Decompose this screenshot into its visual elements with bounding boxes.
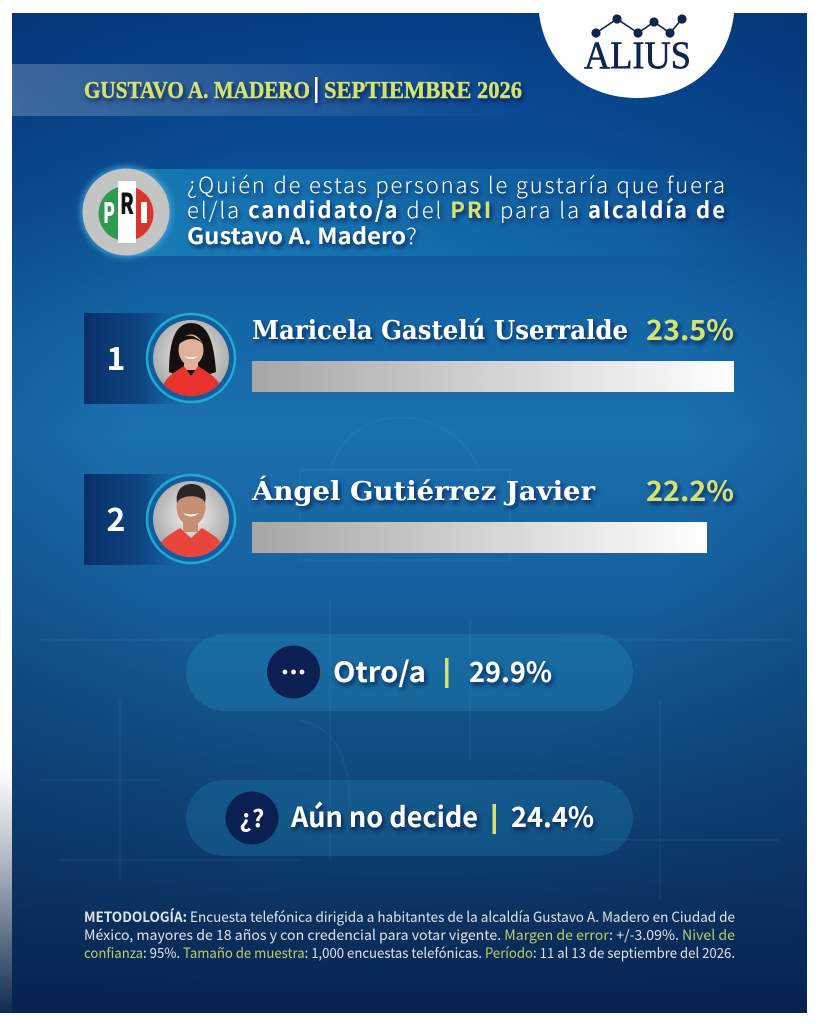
icon: PRI logo: P [103,192,115,232]
methodology note [84,907,735,963]
value 1: 23.5% [646,309,734,349]
question text [187,168,725,251]
left page edge fade [0,770,12,1013]
portrait 1 [147,314,235,402]
question text: Gustavo A. Madero ? [187,219,417,251]
rank 1 tab: 1 [107,334,125,380]
rank 2 tab [84,474,184,565]
bar 1 [252,361,734,392]
icon: question marks: ¿? [240,799,264,834]
methodology note: México, mayores de 18 años y con credencial para votar vigente. Margen de error: +/-3.09%. Nivel de [84,925,735,945]
rank 1 tab [84,313,184,404]
header ribbon [12,64,520,116]
rank 2 tab: 2 [107,495,125,541]
candidate 2 [84,470,734,565]
methodology note: METODOLOGÍA: Encuesta telefónica dirigida a habitantes de la alcaldía Gustavo A. Madero en Ciudad de [84,907,735,927]
icon: question marks [226,792,278,844]
icon: PRI logo [80,166,172,258]
pill: otro/a: 29.9% [469,651,552,691]
heading: location and date: GUSTAVO A. MADERO [84,78,310,104]
logo: ALIUS: ALIUS [584,34,691,77]
pill: otro/a [186,634,633,711]
icon: ellipsis [267,646,320,698]
logo: ALIUS [539,13,734,98]
icon: PRI logo: R [120,181,134,223]
pill: otro/a: Otro/a [333,651,426,691]
portrait 2 [147,475,235,563]
name 2: Ángel Gutiérrez Javier [251,475,595,507]
pill: aun no decide: Aún no decide [290,796,478,836]
candidate 1 [84,309,734,404]
bar 2 [252,522,707,553]
heading: location and date [84,77,522,104]
methodology note: confianza: 95%. Tamaño de muestra: 1,000 encuestas telefónicas. Período: 11 al 13 de septiembre del 2026. [84,943,735,963]
heading: location and date: SEPTIEMBRE 2026 [324,78,522,104]
pill: aun no decide: 24.4% [511,796,594,836]
question band [126,169,746,256]
question text: el/la candidato/a del PRI para la alcaldía de [187,193,725,225]
value 2: 22.2% [646,470,734,510]
name 1: Maricela Gastelú Userralde [252,316,628,346]
question text: ¿Quién de estas personas le gustaría que fuera [187,168,725,200]
pill: aun no decide [186,780,633,856]
